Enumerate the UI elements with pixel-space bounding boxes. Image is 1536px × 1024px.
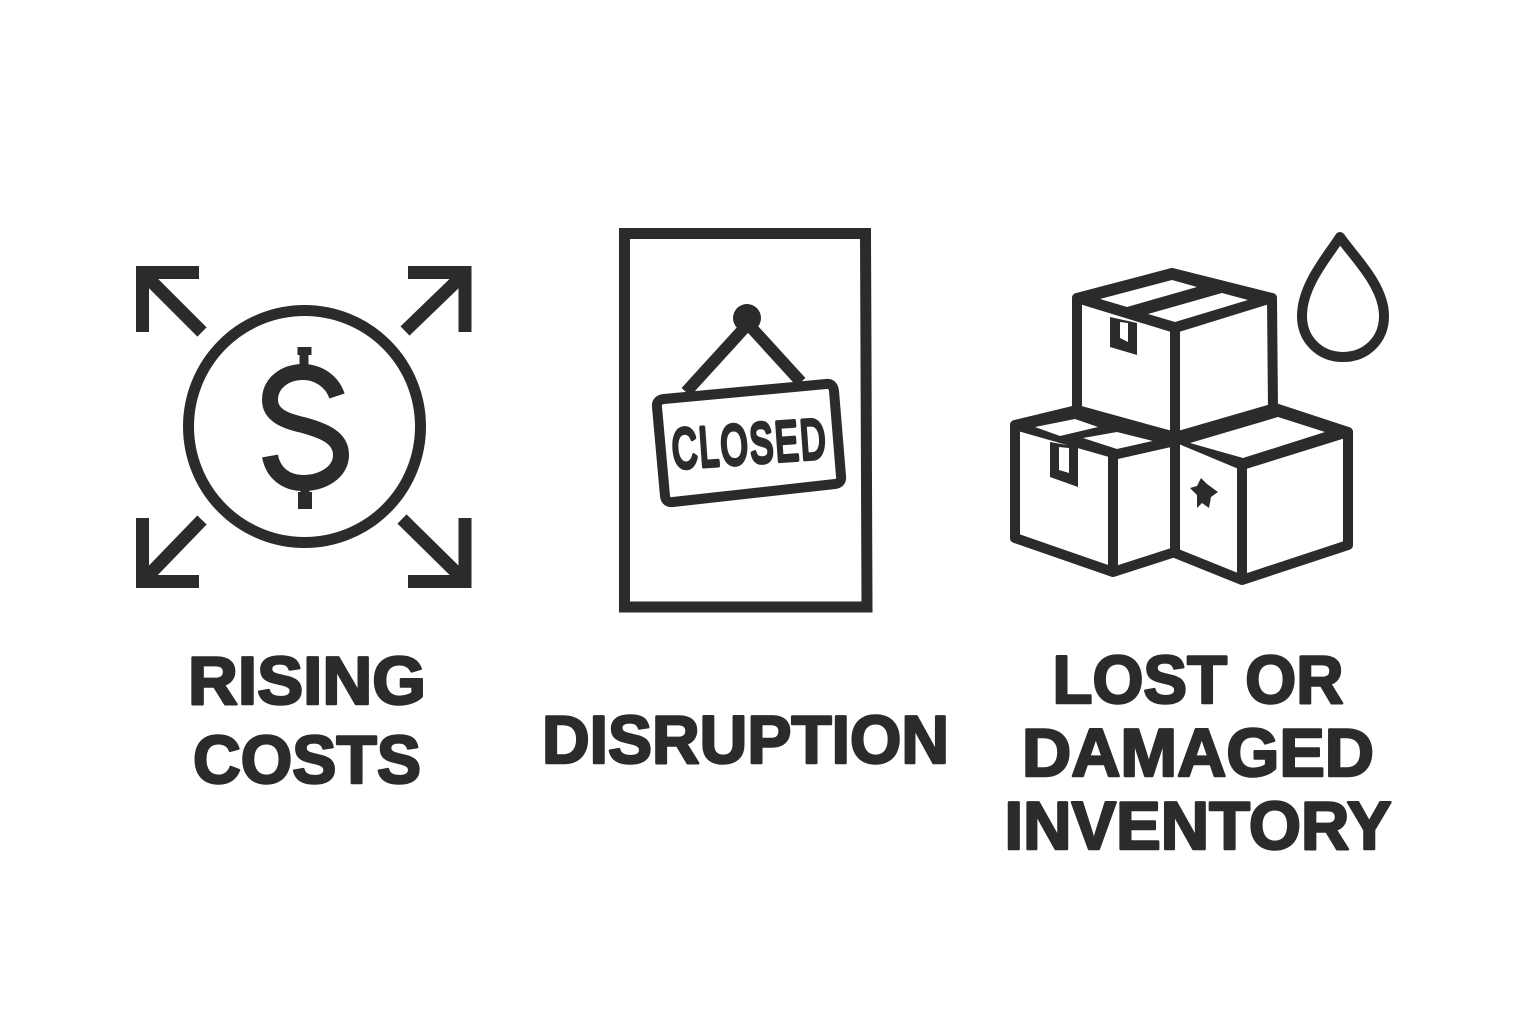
sign text: CLOSED [670,407,828,480]
door frame [624,234,867,607]
label: rising costs [188,643,426,798]
label: lost or damaged inventory: DAMAGED [1022,715,1374,791]
hanging sign [657,384,841,502]
bottom right box [1175,408,1348,580]
label: rising costs: RISING [188,643,426,719]
label: rising costs: COSTS [193,722,421,798]
water drop [1302,237,1384,357]
coin circle [188,310,420,542]
label: lost or damaged inventory: INVENTORY [1004,788,1392,864]
top box [1077,273,1273,437]
arrow: top left [142,272,202,332]
label: lost or damaged inventory [1004,642,1392,864]
icon: dollar circle with four outward arrows [142,272,465,582]
label: disruption: DISRUPTION [542,702,949,778]
label: lost or damaged inventory: LOST OR [1052,642,1344,718]
bottom left box [1015,410,1175,572]
hanging cord [686,324,801,392]
icon: door with closed sign [624,234,867,607]
dollar sign [270,347,341,509]
arrow: bottom right [402,518,465,582]
nail [733,304,761,332]
arrow: top right [405,272,465,332]
arrow: bottom left [142,518,202,582]
icon: stacked boxes with water drop [1015,237,1384,580]
damage mark [1190,478,1218,508]
